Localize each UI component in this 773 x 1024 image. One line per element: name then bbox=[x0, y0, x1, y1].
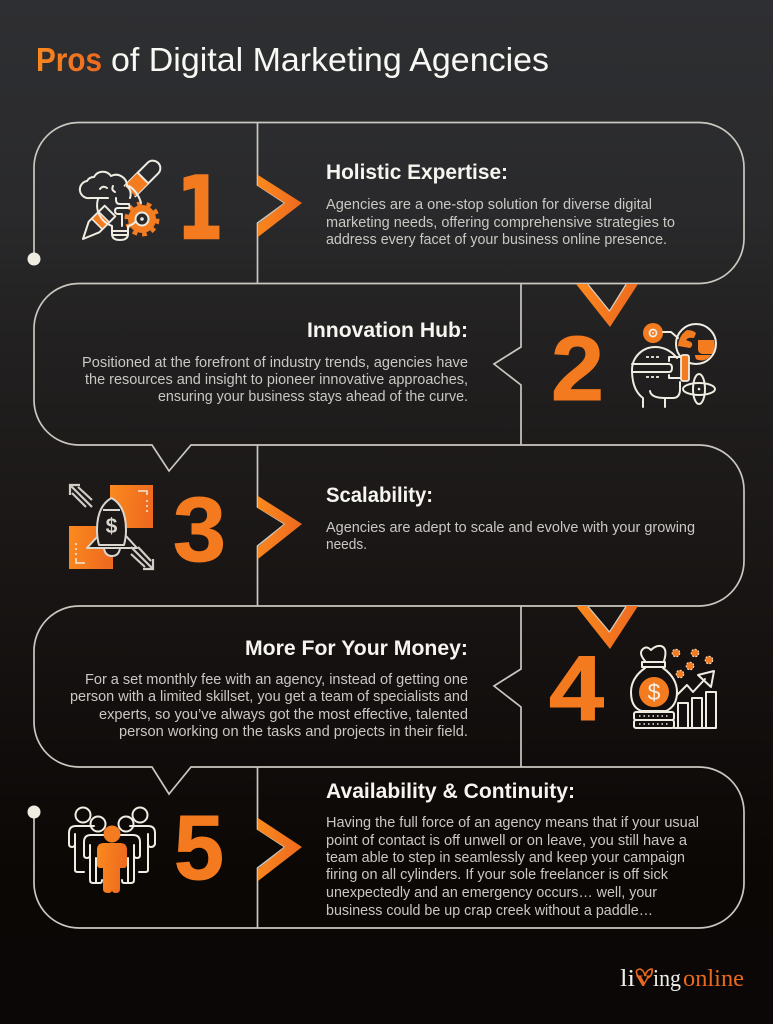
body text: firing on all cylinders. If your sole freelancer is off sick bbox=[326, 867, 669, 883]
body text: experts, so you’ve always got the most effective, talented bbox=[99, 707, 468, 723]
body text: Having the full force of an agency means that if your usual bbox=[326, 815, 699, 831]
body text: Positioned at the forefront of industry trends, agencies have bbox=[82, 355, 468, 371]
panel 3: scalability bbox=[69, 445, 744, 606]
panel 4 orange chevron bbox=[576, 606, 638, 649]
body text bbox=[326, 815, 699, 919]
panel 3 divider with chevron notch bbox=[258, 445, 285, 606]
panel 2 divider with notch bbox=[494, 284, 521, 445]
title: of Digital Marketing Agencies bbox=[111, 41, 549, 78]
logo: living online: ing bbox=[653, 966, 681, 992]
body text: person working on the tasks and projects in their field. bbox=[119, 724, 468, 740]
panel 3 orange chevron bbox=[258, 496, 302, 559]
icon: VR head, globe and atom bbox=[632, 323, 716, 407]
panel 5 start dot bbox=[28, 806, 40, 818]
body text: point of contact is off unwell or on leave, you still have a bbox=[326, 833, 687, 849]
panel 5 outline bbox=[34, 767, 744, 928]
panel 2 orange chevron bbox=[576, 284, 638, 327]
panel 4 outline bbox=[34, 606, 699, 794]
number 5: 5 bbox=[174, 797, 224, 899]
icon: rocket with scaling squares and arrows: $ bbox=[106, 515, 118, 538]
panel 1 outline bbox=[34, 122, 744, 284]
icon: money bag, coins and growth chart bbox=[631, 646, 716, 728]
logo: living online: online bbox=[683, 966, 744, 992]
body text bbox=[326, 197, 675, 248]
number 2: 2 bbox=[551, 318, 604, 420]
body text bbox=[70, 672, 468, 740]
number 3: 3 bbox=[173, 479, 226, 581]
title: Pros bbox=[36, 41, 102, 78]
panel 2: innovation hub bbox=[34, 284, 716, 471]
panel 1: holistic expertise bbox=[28, 122, 744, 284]
body text: Agencies are adept to scale and evolve with your growing bbox=[326, 520, 695, 536]
panel 5 divider with chevron notch bbox=[258, 767, 285, 928]
body text: Agencies are a one-stop solution for diverse digital bbox=[326, 197, 652, 213]
body text: marketing needs, offering comprehensive strategies to bbox=[326, 215, 675, 231]
heading: More For Your Money: bbox=[245, 636, 468, 660]
icon: rocket with scaling squares and arrows bbox=[69, 485, 153, 569]
panel 5 orange chevron bbox=[258, 818, 302, 881]
body text: address every facet of your business online presence. bbox=[326, 232, 667, 248]
body text: ensuring your business stays ahead of the curve. bbox=[158, 389, 468, 405]
body text bbox=[326, 520, 695, 553]
logo: living online: v bbox=[636, 966, 651, 991]
body text: team able to step in seamlessly and keep your campaign bbox=[326, 850, 685, 866]
panel 1 divider with chevron notch bbox=[258, 122, 285, 284]
number 1: 1 bbox=[177, 159, 223, 259]
icon: idea bulb, brain, pencil and gear bbox=[80, 161, 160, 240]
logo: living online bbox=[620, 966, 744, 992]
panel 3 outline bbox=[79, 445, 744, 606]
body text bbox=[82, 355, 468, 405]
body text: For a set monthly fee with an agency, instead of getting one bbox=[85, 672, 468, 688]
panel 1 orange chevron bbox=[258, 175, 302, 237]
heading: Availability & Continuity: bbox=[326, 779, 575, 803]
panel 5: availability and continuity bbox=[28, 767, 744, 928]
body text: the resources and insight to pioneer innovative approaches, bbox=[85, 372, 468, 388]
panel 4 divider with notch bbox=[494, 606, 521, 767]
heading: Holistic Expertise: bbox=[326, 160, 508, 184]
logo: living online: li bbox=[620, 966, 635, 992]
body text: person with a limited skillset, you get a team of specialists and bbox=[70, 689, 468, 705]
icon: money bag, coins and growth chart: $ bbox=[648, 679, 661, 705]
panel 4: more for your money bbox=[34, 606, 716, 794]
panel 1 start dot bbox=[28, 252, 40, 266]
heading: Innovation Hub: bbox=[307, 318, 468, 342]
body text: unexpectedly and an emergency occurs… well, your bbox=[326, 885, 657, 901]
heading: Scalability: bbox=[326, 483, 433, 507]
body text: needs. bbox=[326, 537, 367, 553]
number 4: 4 bbox=[549, 638, 604, 740]
body text: business could be up crap creek without a paddle… bbox=[326, 903, 653, 919]
panel 2 outline bbox=[34, 284, 699, 471]
icon: team of people bbox=[69, 808, 155, 893]
